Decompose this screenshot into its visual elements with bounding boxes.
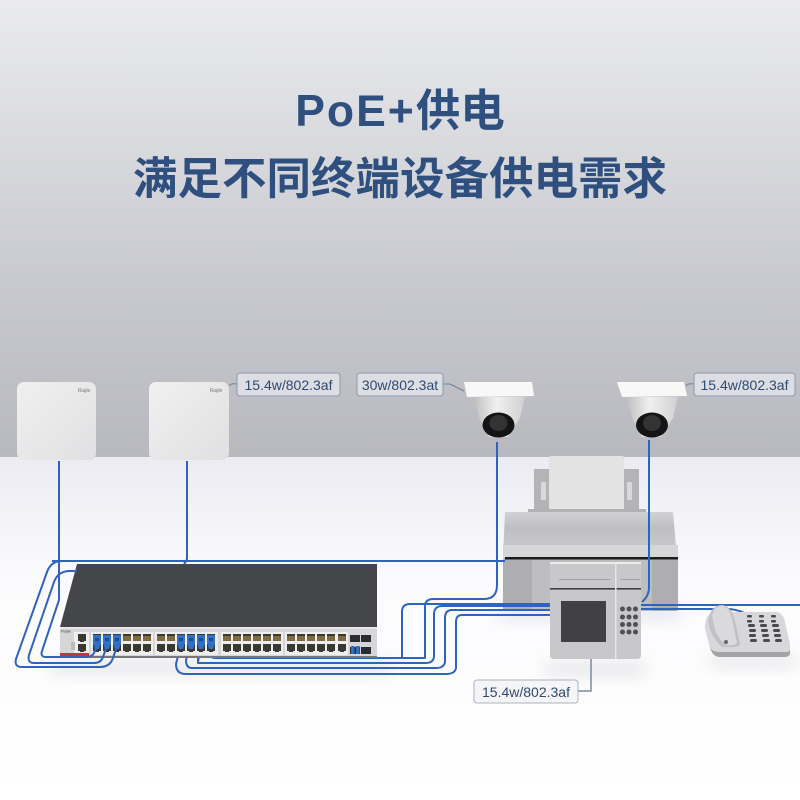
switch console ports (71, 634, 86, 652)
label: access point power: 15.4w/802.3af (245, 377, 333, 393)
access point 1 (17, 382, 96, 460)
label: camera 1 power (357, 373, 464, 396)
label: terminal device power (474, 659, 591, 703)
switch uplink cables (16, 461, 187, 667)
access point 1: Ruijie (78, 388, 90, 394)
access point 2 (149, 382, 229, 460)
switch RJ45 bottom row (93, 644, 346, 652)
blue connectors in switch ports (93, 635, 360, 654)
switch status label (60, 653, 89, 656)
floor shadows (50, 605, 795, 676)
terminal device (550, 562, 641, 659)
switch brand text: Ruijie (61, 628, 72, 634)
label: access point power (229, 373, 340, 396)
label: camera 2 power (686, 373, 795, 396)
device screen (561, 601, 606, 642)
title: PoE+供电 (295, 74, 505, 139)
access point 2: Ruijie (210, 388, 222, 394)
switch RJ45 top row (93, 634, 346, 641)
label: camera 1 power: 30w/802.3at (362, 377, 438, 393)
telephone keypad (747, 615, 782, 642)
camera 2 (617, 382, 687, 438)
device keypad (620, 606, 638, 634)
camera 1 (464, 382, 534, 438)
background floor (0, 457, 800, 800)
title: 满足不同终端设备供电需求 (133, 142, 667, 207)
label: camera 2 power: 15.4w/802.3af (701, 377, 789, 393)
switch port frames (74, 632, 348, 655)
printer (503, 456, 678, 611)
title (133, 74, 667, 207)
background wall (0, 0, 800, 457)
switch SFP ports (350, 635, 371, 654)
telephone (705, 605, 790, 657)
label: terminal device power: 15.4w/802.3af (482, 684, 570, 700)
cable bundle: camera, printer and phone runs (52, 440, 800, 674)
switch (60, 564, 377, 658)
